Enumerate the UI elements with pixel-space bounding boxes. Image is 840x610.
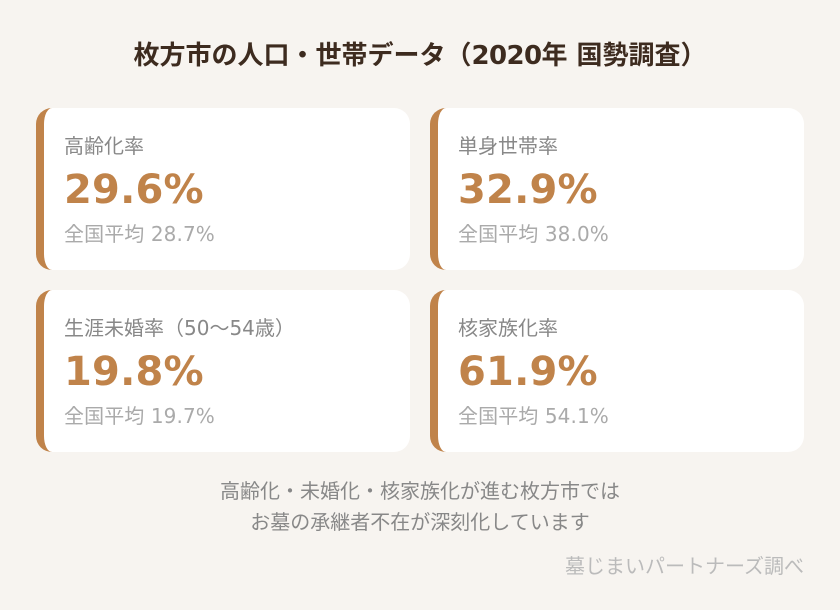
value: lifetime unmarried rate: 19.8% [64, 349, 204, 395]
national average: single-person household rate: 全国平均 38.0% [458, 222, 609, 246]
national average: nuclear family rate: 全国平均 54.1% [458, 404, 609, 428]
panel: lifetime unmarried rate [36, 290, 410, 452]
label: single-person household rate: 単身世帯率 [458, 134, 558, 158]
value: single-person household rate: 32.9% [458, 167, 598, 213]
value: nuclear family rate: 61.9% [458, 349, 598, 395]
label: nuclear family rate: 核家族化率 [458, 316, 558, 340]
value: aging rate: 29.6% [64, 167, 204, 213]
label: lifetime unmarried rate: 生涯未婚率（50～54歳） [64, 316, 295, 340]
label: aging rate: 高齢化率 [64, 134, 144, 158]
national average: aging rate: 全国平均 28.7% [64, 222, 215, 246]
panel: single-person household rate [430, 108, 804, 270]
panel: nuclear family rate [430, 290, 804, 452]
source credit: 墓じまいパートナーズ調べ [565, 554, 804, 578]
summary text: 高齢化・未婚化・核家族化が進む枚方市では [220, 479, 620, 503]
title: 枚方市の人口・世帯データ（2020年 国勢調査） [133, 41, 707, 71]
panel: aging rate [36, 108, 410, 270]
summary text [220, 479, 620, 534]
national average: lifetime unmarried rate: 全国平均 19.7% [64, 404, 215, 428]
summary text: お墓の承継者不在が深刻化しています [250, 510, 590, 534]
